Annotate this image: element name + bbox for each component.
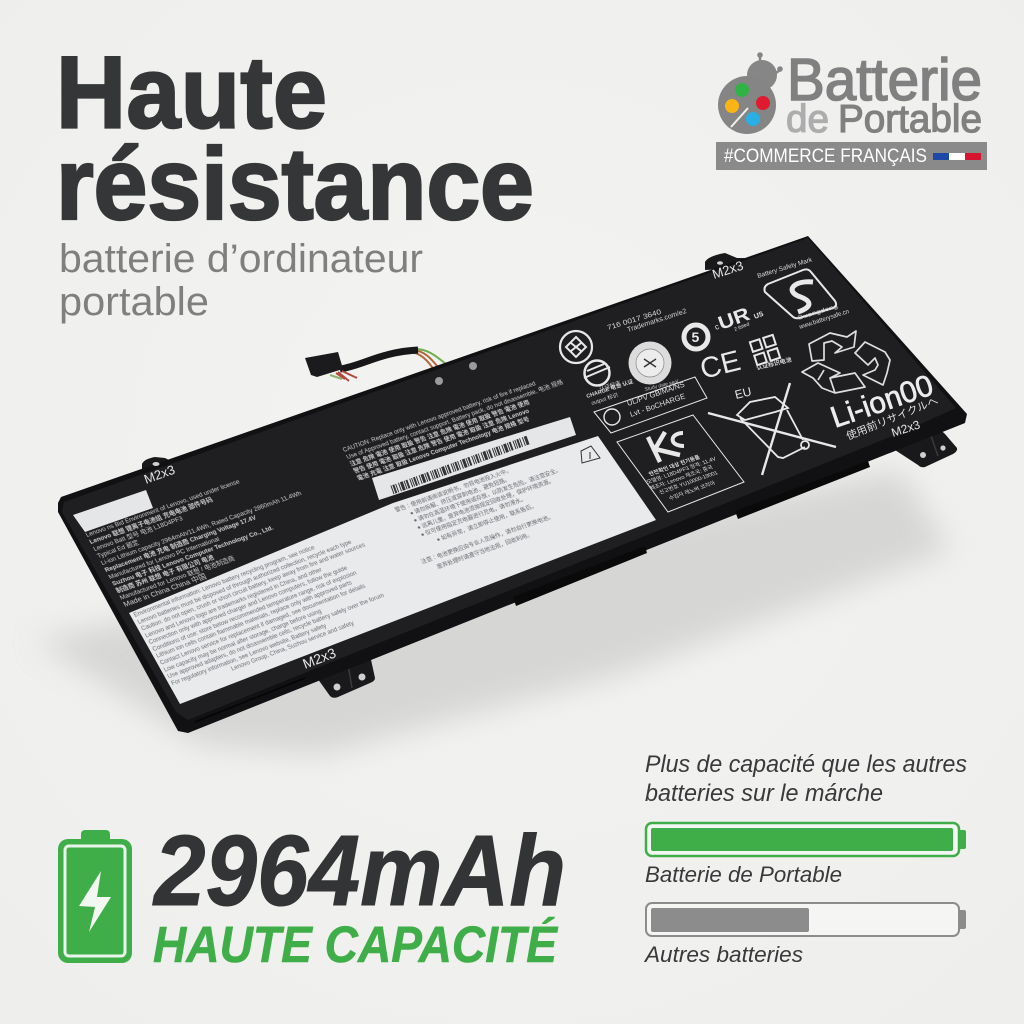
mark: CE: CE [697,345,744,386]
small top text [607,256,850,334]
logo wordmark: Batterie [787,47,982,113]
mark: white seal disc [628,342,679,393]
small top text: Battery Safety Mark [757,256,814,280]
white label CJK text [393,451,586,574]
white label text: Use approved adapters, do not disassemble cells, recycle battery safely over the forum [166,592,386,680]
white label CJK text: ● 如有异常，请立即停止使用，联系售后。 [435,501,538,543]
mark: KC box: 모델명: L18D4PF3 정격: 11.4V [645,455,718,486]
title: Haute [56,36,327,150]
white label text: Lenovo and Lenovo logo are trademarks registered in China, and other [144,566,323,639]
white label text: Lithium ion cells contain flammable materials, replace only with approved parts [155,580,353,660]
white label CJK text: ● 请勿拆解、挤压或穿刺电池，避免短路。 [408,475,511,517]
white label CJK text: ● 仅可使用指定充电器进行充电，请勿浸水。 [419,495,528,538]
left regulatory text: Replacement 电池 充电 制造商 Charging Voltage 17.4V [103,512,258,574]
icon: ladybug palette [718,52,783,134]
mark: battery info box: Lvt - BoCHARGE [629,392,686,419]
white label text: Connection only with approved charger and Lenovo computers, follow the guide [148,565,349,646]
left regulatory text: Made in China China 中国 [121,571,208,609]
mark: UL: 2 listed [734,321,751,333]
regulatory marks [560,269,890,512]
white label text: Lenovo Group, China, Suzhou service and safety [230,620,356,673]
comparison heading: Plus de capacité que les autres [645,751,967,778]
white label top-left [73,490,153,532]
mark: globe arrow [584,360,635,407]
comparison panel [643,751,967,967]
warning triangle [581,446,600,463]
icon: green battery [58,830,132,963]
mark: crossed-out bin: EU [733,384,753,402]
M2x3 labels: M2x3 [142,462,177,487]
small top text: Guangdong [797,304,839,322]
left regulatory text: 制造商 苏州 联想 电子 有限公司 电池 [114,552,216,595]
mark: UL: c [713,322,720,332]
mounting tabs [142,253,957,698]
mark: KC box: 수입자 레노버 코리아 [667,479,717,502]
banner: commerce français [716,142,987,170]
mark: UL: UR [716,304,753,335]
mark: globe arrow: output 标识 [590,391,620,407]
label: Batterie de Portable: Batterie de Portable [645,862,842,887]
connector cable [305,349,446,381]
bar: Batterie de Portable [646,823,966,856]
caution text: CAUTION: Replace only with Lenovo approved battery, risk of fire if replaced [342,381,537,454]
capacity callout [58,815,566,973]
mark: globe arrow: 认证标志 [598,378,622,393]
mark: recycling arrows [802,331,890,393]
mark: UL [713,304,765,335]
mark: recycling 5 [684,325,708,349]
battery shadow [35,470,950,755]
white label text: Environmental information: Lenovo battery recycling program, see notice [133,544,317,619]
white label text [133,528,400,694]
Li-ion text: Li-ion00 [827,369,938,435]
white label CJK text: ● 请勿在高温环境下使用或存放，以防发生危险。请注意安全。 [412,466,563,524]
main white label [129,436,656,704]
white label text: Lenovo batteries must be disposed of through authorized collection, recycle each type [136,538,353,626]
left regulatory text: Manufactured for Lenovo 联想 / 电池制造商 [118,554,236,602]
capacity number: 2964mAh [152,815,566,927]
comparison heading [645,751,967,807]
title: résistance [56,128,534,242]
mark: KC box: 제조자: Lenovo 제조국: 중국 [648,463,714,492]
white label text: Low capacity may be normal after storage, charge before using [163,608,323,673]
battery body [58,236,967,733]
comparison heading: batteries sur le márche [645,780,883,807]
logo wordmark: de [786,98,829,141]
subtitle: batterie d’ordinateur [59,237,423,281]
left regulatory text: Lenovo 联想 锂离子电池组 充电电池 部件号码 [87,495,214,546]
M2x3 labels: M2x3 [300,645,338,672]
white label CJK text: 警告：使用前请阅读说明书，勿将电池投入火中。 [393,466,513,514]
small top text: 716 0017 3640 [607,309,662,332]
mark: KC box: 신고번호 YU10000-19001 [657,469,719,496]
capacity label: HAUTE CAPACITÉ [153,916,559,973]
bar: Autres batteries [646,903,966,936]
mark: UL: US [753,311,765,321]
white label text: Conditions of use: store below recommended temperature range, risk of explosion [151,570,358,653]
left regulatory text: Manufactured for Lenovo PC International [107,536,221,581]
caution text: 警告 使用 電池 取扱 注意 危険 警告 使用 電池 取扱 注意 危険 Lenovo [352,407,531,475]
mark: square logo [750,335,792,372]
title [56,36,534,242]
side slots [513,546,647,606]
white label CJK text: ● 远离儿童，废弃电池须按规定回收处理，保护环境资源。 [415,476,556,531]
white label CJK text: 注意：电池更换应由专业人员操作，请勿自行更换电池。 [419,512,555,565]
mark: KC box: 안전확인 대상 전기용품 [647,453,701,478]
mark: S logo box [764,269,836,318]
M2x3 labels [142,258,922,672]
caution text: 電池 充電 注意 取扱 Lenovo Computer Technology 电池 规格 型号 [356,415,531,482]
subtitle: portable [59,280,209,324]
mark: white seal disc: Study date seal [644,379,679,393]
left regulatory text: Lenovo Batt 型号 电池 L18D4PF3 [91,513,185,553]
white label text: For regulatory information, see Lenovo website, Battery safety [170,622,329,687]
mark: recycling 5: 5 [692,329,700,345]
white label text: Caution: do not open, crush or short circuit battery, keep away from fire and water sources [140,542,367,632]
mark: battery info box: UL/PV GB/MA/NS [626,380,686,408]
small top text: www.batterysafe.cn [798,308,850,331]
M2x3 labels: M2x3 [890,417,922,440]
small top text: Trademarks.com/e2 [626,308,688,334]
caution text: Use of Approved battery, contact support. Battery pack, do not disassemble, 电池 规格 [345,378,565,461]
subtitle [59,237,423,324]
white label text: Contact Lenovo service for replacement if damaged, see documentation for details [159,583,367,667]
left regulatory text: Typical Ed 额定 [95,537,140,560]
caution text: 注意 危険 電池 使用 取扱 警告 注意 危険 電池 使用 取扱 警告 電池 使用 [348,398,531,468]
mark: globe arrow: CHARGE 电池 认证 [585,377,635,400]
battery illustration [58,236,967,733]
caution text [342,373,575,482]
logo wordmark [786,47,982,141]
left regulatory text [85,462,326,609]
label: Autres batteries: Autres batteries [643,942,803,967]
mark: battery info box [594,377,707,433]
recycle caption: 使用前リサイクルへ [844,394,940,443]
left regulatory text: Lenovo ns Bid Environment of Lenovo, used under license [85,478,242,539]
banner: commerce français: #COMMERCE FRANÇAIS [724,146,927,167]
tab holes [152,261,946,690]
white label CJK text: 废弃处理时请遵守当地法规，回收利用。 [435,530,534,570]
mark: diamond seal [560,331,592,363]
barcode label [372,417,576,500]
mark: KC box [617,415,744,512]
mark: crossed-out bin [708,383,836,475]
left regulatory text: Suzhou 电子 科技 Lenovo Computer Technology Co., Ltd. [110,523,275,588]
logo: Batterie de Portable [716,47,987,170]
left regulatory text: Li-ion Lithium capacity 2964mAh/11.4Wh, Rated Capacity 2860mAh 11.4Wh [100,490,303,567]
logo wordmark: Portable [838,98,982,141]
M2x3 labels: M2x3 [710,258,745,282]
mark: square logo: 认证标识电池 [756,355,792,372]
